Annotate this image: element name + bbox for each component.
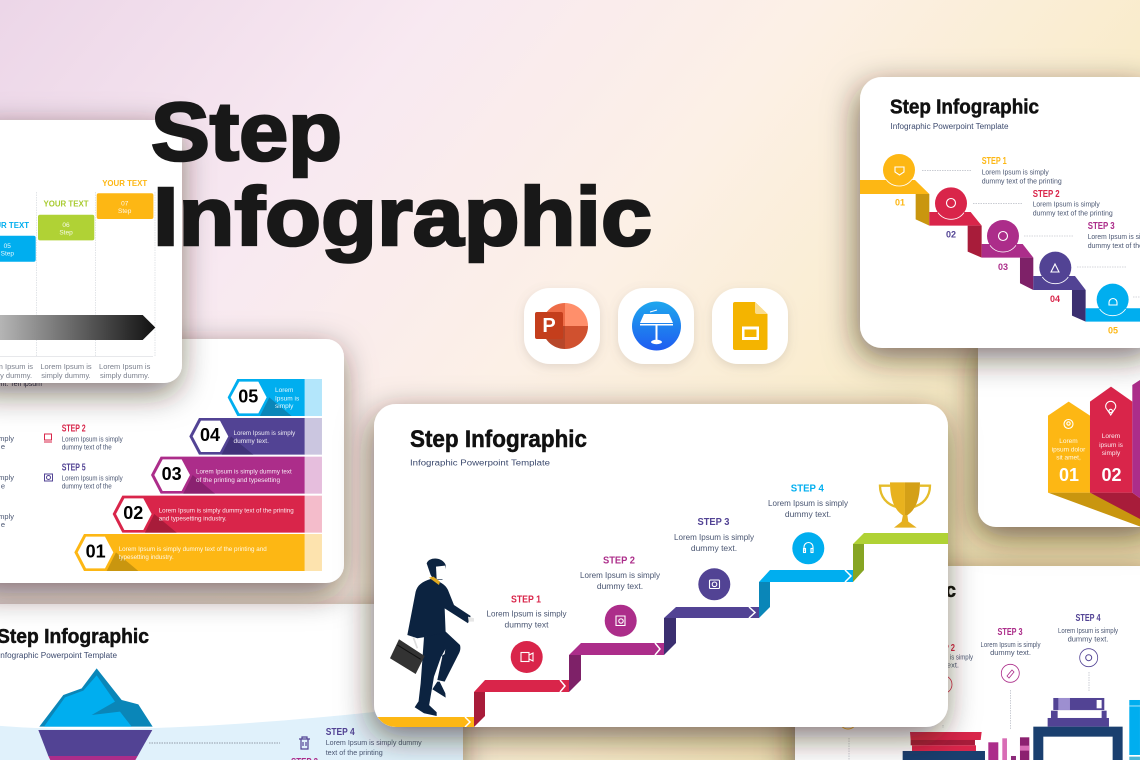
- step 3: Lorem Ipsum is simply: [980, 640, 1041, 649]
- yellow column text: Lorem: [1059, 438, 1078, 445]
- numbers: 01: [895, 198, 905, 208]
- numbers: 02: [123, 503, 143, 523]
- step 2 text: [62, 423, 123, 452]
- numbers: 04: [1050, 294, 1060, 304]
- step 3 text: [1088, 221, 1140, 250]
- step 4 body second line: text of the printing: [326, 748, 383, 757]
- icon: pin yellow: [1064, 420, 1073, 428]
- numbers: 03: [998, 262, 1008, 272]
- step 4: Lorem Ipsum is simply: [1058, 626, 1118, 635]
- step 1 text: Lorem Ipsum is simply: [486, 608, 567, 618]
- icon circle: step 4 headphones: [792, 532, 824, 564]
- box: step 05: [0, 236, 36, 262]
- books and desk illustration: [903, 698, 1140, 760]
- step 4 text: STEP 4: [326, 727, 355, 738]
- icon circle: step 1 video: [511, 641, 543, 673]
- column captions: Lorem Ipsum is: [40, 362, 92, 371]
- step 2 text: dummy text.: [597, 581, 643, 591]
- step 4 text: Lorem Ipsum is simply: [768, 498, 849, 508]
- red column text: [1099, 433, 1124, 457]
- hand: [468, 617, 474, 622]
- panel: left hexagon steps slide: [0, 339, 344, 583]
- step 4: dummy text.: [1068, 634, 1108, 644]
- step 4: STEP 4: [1076, 613, 1101, 624]
- step 3 text: dummy text.: [691, 543, 737, 553]
- numbers: 02: [946, 230, 956, 240]
- icon circle: step 3 camera: [698, 568, 730, 600]
- icon: step 2: [44, 434, 52, 442]
- step 4 text: [768, 484, 849, 519]
- numbers: 03: [162, 464, 182, 484]
- staircase: [860, 154, 1140, 322]
- heading: Step Infographic: [807, 579, 956, 602]
- yellow column text: ipsum dolor: [1052, 446, 1086, 454]
- step 2 text: STEP 2: [1033, 189, 1060, 200]
- row 01 text: [119, 546, 267, 561]
- yellow column text: [1052, 438, 1086, 462]
- step 5 text: STEP 5: [62, 462, 86, 473]
- gradient arrow: [0, 315, 155, 340]
- icon: trophy: [880, 482, 930, 528]
- icon: pin red: [1106, 401, 1116, 415]
- panel: right arrows slide: [978, 330, 1140, 528]
- raised leg: [424, 632, 460, 682]
- staircase: [374, 533, 948, 727]
- step 3 text: [674, 517, 755, 553]
- briefcase: [390, 639, 425, 674]
- row 02 text: [159, 508, 294, 522]
- connector line: [149, 742, 280, 744]
- iceberg diagram: [38, 668, 153, 760]
- step 3 text: Lorem Ipsum is simply: [674, 532, 755, 542]
- panel: bottom-left iceberg slide: [0, 604, 470, 760]
- red column text: Lorem: [1102, 433, 1120, 440]
- left fragments: e: [1, 442, 5, 451]
- icon: Google Slides: [712, 288, 788, 364]
- step 2 text: STEP 2: [603, 556, 635, 566]
- hexagon bands: [74, 379, 322, 571]
- box: step 07: [97, 193, 153, 219]
- icon: PowerPoint: P: [542, 315, 556, 337]
- step 2: dummy text.: [918, 660, 959, 670]
- step 2 text: Lorem Ipsum is simply: [1033, 200, 1100, 208]
- box: step 07: Step: [118, 208, 132, 215]
- red column text: ipsum is: [1099, 442, 1124, 449]
- step 2 text: dummy text of the: [62, 442, 112, 452]
- step 2 text: Lorem Ipsum is simply: [62, 434, 123, 443]
- row 05 text: Ipsum is: [275, 395, 300, 402]
- numbers: 05: [238, 387, 258, 407]
- arrow columns: [1048, 377, 1140, 528]
- panel: top-right descending steps slide: [860, 77, 1140, 348]
- row 05 text: simply: [275, 403, 294, 410]
- row 02 text: and typesetting industry.: [159, 516, 227, 522]
- box: step 07: 07: [121, 200, 129, 208]
- step 1 text: dummy text: [505, 620, 549, 630]
- box: step 05: 05: [4, 243, 11, 250]
- numbers: [895, 198, 1118, 336]
- heading: Step Infographic: [410, 426, 587, 453]
- panel: top-left timeline slide: [0, 120, 182, 383]
- column captions: [0, 362, 151, 380]
- row 04 text: [234, 430, 296, 445]
- step 1 text: Lorem Ipsum is simply: [982, 168, 1049, 176]
- column captions: simply dummy.: [100, 371, 149, 380]
- numbers: 01: [86, 542, 106, 562]
- step 3: dummy text.: [990, 648, 1031, 657]
- numbers: 05: [1108, 326, 1118, 336]
- step 5 text: Lorem Ipsum is simply: [62, 473, 123, 482]
- step 5 text: [62, 462, 123, 491]
- heading: Step Infographic: [0, 625, 149, 648]
- step 3: STEP 3: [998, 627, 1023, 638]
- jacket: [407, 579, 471, 638]
- step 4 text: dummy text.: [785, 509, 831, 519]
- step 2: [948, 644, 973, 692]
- numbers: [86, 387, 258, 562]
- standing leg: [418, 633, 446, 706]
- step 2 text: STEP 2: [62, 423, 86, 434]
- title: Infographic: [153, 170, 652, 263]
- step 3 text: STEP 3: [698, 517, 730, 528]
- step 1 text: [982, 156, 1062, 186]
- row 04 text: dummy text.: [234, 438, 269, 445]
- timeline grid: [0, 192, 155, 356]
- subtitle: Infographic Powerpoint Template: [890, 122, 1009, 131]
- row 03 text: Lorem Ipsum is simply dummy text: [196, 468, 292, 476]
- step 2: Lorem Ipsum is simply: [913, 652, 973, 662]
- row 03 text: of the printing and typesetting: [196, 477, 280, 484]
- box: step 05: Step: [1, 251, 14, 258]
- icon: PowerPoint: [524, 288, 600, 364]
- step 5 text: dummy text of the: [62, 482, 112, 491]
- head: [427, 559, 446, 580]
- arrows: [922, 170, 1140, 297]
- step 4 text: STEP 4: [791, 484, 824, 494]
- step 1 text: STEP 1: [982, 156, 1007, 167]
- shoes: [415, 682, 446, 716]
- icon: step 5: [44, 474, 52, 481]
- red column text: simply: [1102, 450, 1121, 457]
- yellow column text: sit amet,: [1056, 454, 1081, 462]
- row 03 text: [196, 468, 292, 484]
- column captions: Lorem Ipsum is: [99, 362, 151, 371]
- label: your text green: YOUR TEXT: [44, 200, 89, 209]
- row 04 text: Lorem Ipsum is simply: [234, 430, 296, 437]
- row 01 text: Lorem Ipsum is simply dummy text of the printing and: [119, 546, 267, 553]
- heading: Step Infographic: [890, 96, 1039, 118]
- column captions: simply dummy.: [41, 371, 91, 380]
- subtitle: Infographic Powerpoint Template: [410, 458, 551, 468]
- step icons: [895, 167, 1117, 305]
- step 3: [980, 627, 1041, 730]
- number 02: 02: [1101, 465, 1122, 485]
- step 2 text: [580, 556, 661, 591]
- icon circle: step 2 folder: [605, 605, 637, 637]
- step 1 text: [486, 594, 567, 630]
- step 2 text: [1033, 189, 1113, 218]
- step 3 text: STEP 3: [1088, 221, 1115, 232]
- left fragments: e: [1, 520, 5, 529]
- step 2 text: dummy text of the printing: [1033, 208, 1113, 218]
- box: step 06: [38, 215, 94, 240]
- left fragments: [0, 434, 14, 529]
- step 4 body: Lorem Ipsum is simply dummy: [326, 738, 422, 747]
- step 2: STEP 2: [929, 643, 955, 654]
- left fragments: e: [1, 482, 5, 490]
- icon: trash: [299, 737, 310, 749]
- icon: Keynote: [618, 288, 694, 364]
- row 01 text: typesetting industry.: [119, 554, 174, 561]
- panel: central staircase slide: [374, 404, 948, 727]
- step 2 text: Lorem Ipsum is simply: [580, 570, 661, 580]
- row 02 text: Lorem Ipsum is simply dummy text of the printing: [159, 508, 294, 514]
- numbers: 04: [200, 425, 220, 445]
- label: your text yellow: YOUR TEXT: [102, 179, 147, 188]
- subtitle: Infographic Powerpoint Template: [0, 651, 118, 660]
- step 1 text: STEP 1: [511, 594, 541, 606]
- number 01: 01: [1059, 465, 1079, 485]
- box: step 06: 06: [62, 222, 70, 229]
- water wave: [0, 711, 470, 760]
- step 4: [1058, 613, 1118, 692]
- businessman figure: [390, 559, 474, 716]
- title: [151, 85, 652, 263]
- box: step 06: Step: [59, 230, 73, 236]
- row 05 text: [275, 387, 300, 410]
- row 05 text: Lorem: [275, 387, 293, 394]
- title: Step: [151, 85, 342, 178]
- left step connector: [842, 725, 944, 760]
- panel: bottom-right books slide: [795, 566, 1140, 760]
- step 1 text: dummy text of the printing: [982, 176, 1062, 186]
